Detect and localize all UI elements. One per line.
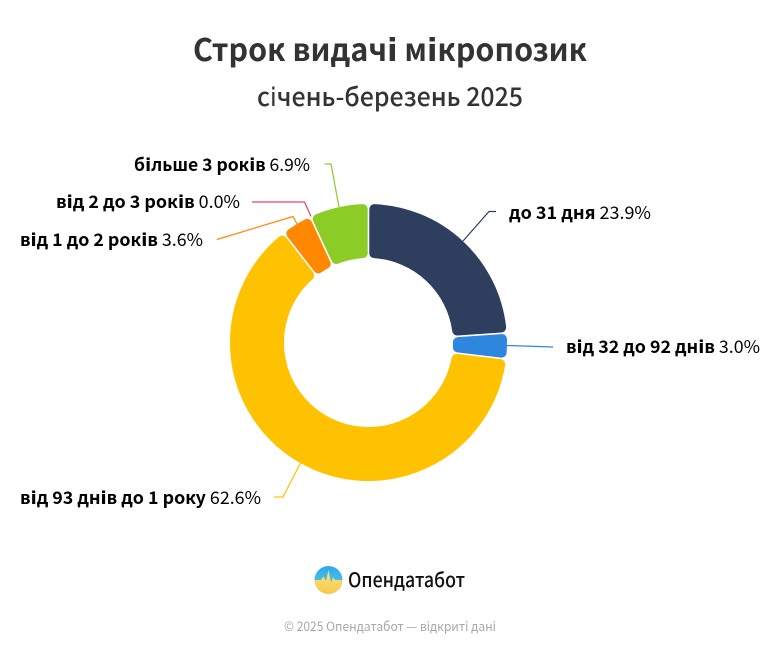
leader line: від 32 до 92 днів	[507, 346, 553, 347]
icon: Opendatabot logo	[314, 566, 343, 594]
segment: до 31 дня	[374, 209, 501, 331]
leader line: більше 3 років	[324, 164, 339, 207]
label: від 32 до 92 днів: від 32 до 92 днів 3.0%	[566, 334, 760, 359]
label: більше 3 років: більше 3 років 6.9%	[134, 152, 310, 177]
donut chart	[235, 209, 502, 476]
leader line: від 1 до 2 років	[217, 216, 297, 240]
brand name: Опендатабот	[348, 564, 465, 593]
leader line: до 31 дня	[463, 212, 496, 241]
label: до 31 дня: до 31 дня 23.9%	[509, 200, 651, 225]
subtitle: січень-березень 2025	[257, 77, 523, 114]
label: від 2 до 3 років: від 2 до 3 років 0.0%	[56, 189, 240, 214]
leader line: від 2 до 3 років	[252, 202, 311, 216]
segment: від 32 до 92 днів	[458, 339, 502, 353]
segment: від 93 днів до 1 року	[235, 241, 500, 476]
label: від 1 до 2 років: від 1 до 2 років 3.6%	[20, 227, 203, 252]
label: від 93 днів до 1 року: від 93 днів до 1 року 62.6%	[20, 485, 261, 510]
leader line: від 93 днів до 1 року	[274, 462, 301, 497]
segment: більше 3 років	[318, 209, 363, 259]
footer copyright: © 2025 Опендатабот — відкриті дані	[284, 616, 496, 635]
segment: від 1 до 2 років	[291, 224, 326, 268]
title: Строк видачі мікропозик	[193, 25, 587, 70]
